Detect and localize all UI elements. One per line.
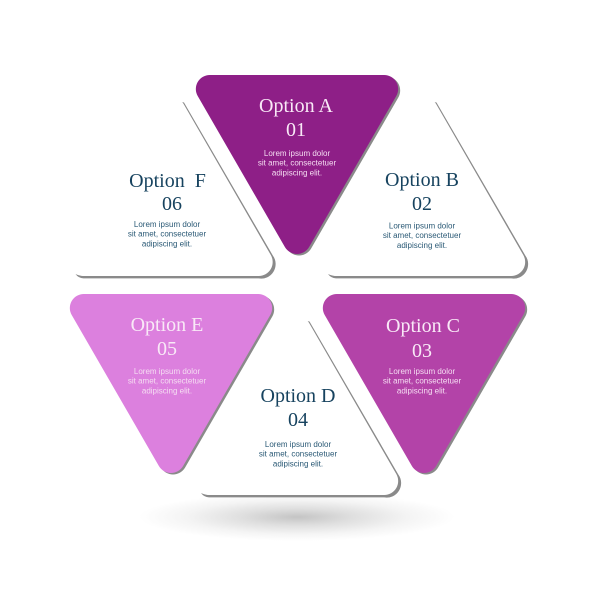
panel: option F bbox=[70, 97, 276, 279]
panel: option B: Lorem ipsum dolor bbox=[389, 222, 455, 230]
panel: option E: sit amet, consectetuer bbox=[128, 377, 206, 386]
panel: option F: Option F bbox=[129, 170, 206, 192]
panel: option C: Option C bbox=[386, 315, 460, 337]
panel: option F: sit amet, consectetuer bbox=[128, 230, 206, 239]
panel: option A: Option A bbox=[259, 95, 334, 117]
panel: option D: Option D bbox=[260, 385, 336, 407]
panel: option B bbox=[323, 97, 528, 279]
panel: option E: Option E bbox=[131, 314, 203, 336]
panel: option F: Lorem ipsum dolor bbox=[134, 220, 200, 229]
panel: option A: adipiscing elit. bbox=[272, 168, 322, 177]
panel: option F: adipiscing elit. bbox=[142, 239, 192, 248]
panel: option C: 03 bbox=[412, 340, 432, 362]
panel: option C: sit amet, consectetuer bbox=[383, 377, 461, 386]
panel: option C bbox=[323, 294, 527, 474]
panel: option D: adipiscing elit. bbox=[273, 459, 323, 468]
panel: option B: adipiscing elit. bbox=[397, 241, 447, 250]
panel: option B: Option B bbox=[385, 169, 459, 191]
panel: option D: sit amet, consectetuer bbox=[259, 450, 337, 459]
panel: option E: Lorem ipsum dolor bbox=[134, 367, 200, 376]
panel: option A: Lorem ipsum dolor bbox=[264, 149, 330, 158]
panel: option D: Lorem ipsum dolor bbox=[265, 440, 331, 449]
panel: option C: adipiscing elit. bbox=[397, 386, 447, 395]
panel: option E: 05 bbox=[157, 338, 177, 360]
panel: option E bbox=[70, 294, 274, 474]
panel: option B: 02 bbox=[412, 193, 432, 215]
panel: option D: 04 bbox=[288, 409, 308, 431]
panel: option A: 01 bbox=[286, 119, 306, 141]
panel: option A: sit amet, consectetuer bbox=[258, 159, 336, 168]
panel: option C: Lorem ipsum dolor bbox=[389, 367, 455, 376]
panel: option E: adipiscing elit. bbox=[142, 386, 192, 395]
panel: option F: 06 bbox=[162, 193, 182, 215]
ground shadow bbox=[139, 493, 455, 541]
panel: option D bbox=[196, 316, 401, 498]
panel: option A bbox=[196, 75, 400, 255]
panel: option B: sit amet, consectetuer bbox=[383, 231, 461, 240]
